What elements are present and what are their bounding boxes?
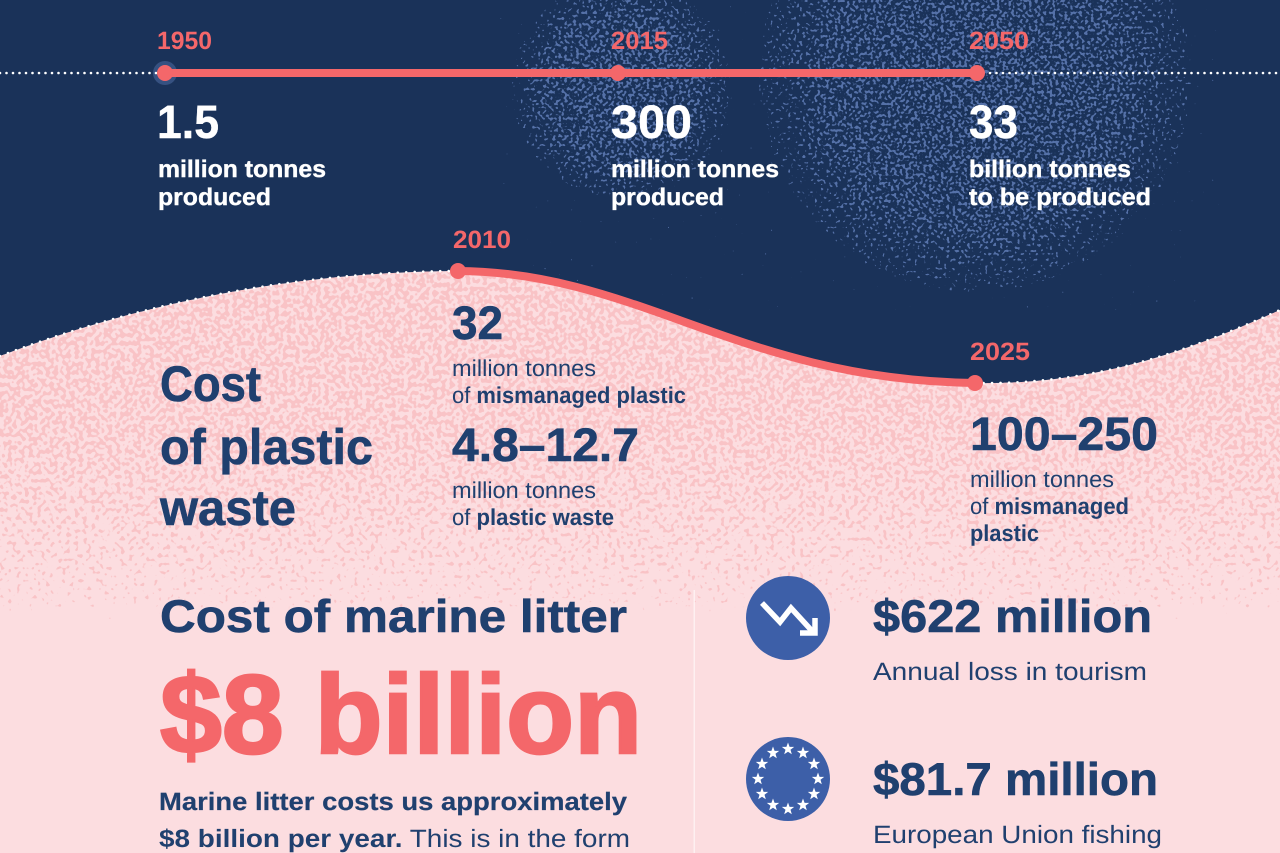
stat: 2025: 2025 (970, 338, 1030, 366)
stat: 1950: 1.5 (157, 95, 219, 148)
divider (694, 590, 695, 853)
stat: 2015: 2015 (611, 27, 668, 55)
stat: 2010: million tonnes (452, 477, 596, 503)
heading: cost of plastic waste (159, 356, 373, 536)
small production circle 1950 (153, 61, 177, 85)
stat: 2025: 100–250 (970, 407, 1158, 460)
stat: 2025: plastic (970, 520, 1039, 546)
stat: 2025: million tonnes (970, 466, 1114, 492)
heading: cost of plastic waste: Cost (160, 356, 261, 412)
panel: cost of marine litter (159, 590, 642, 853)
stat: 2015: million tonnes (611, 156, 779, 183)
icon: falling trend arrow (746, 576, 830, 660)
stat: tourism loss (873, 590, 1152, 686)
stat: tourism loss: Annual loss in tourism (873, 658, 1147, 686)
stat: EU fishing (873, 753, 1162, 849)
panel: cost of marine litter: $8 billion per year. This is in the form (159, 825, 630, 853)
dotted white edge of wave (0, 271, 1280, 383)
stat: 2010: 4.8–12.7 (452, 418, 639, 471)
stat: 2050: 2050 (969, 27, 1029, 55)
stat: 2050: billion tonnes (969, 156, 1131, 183)
panel: cost of marine litter: Marine litter costs us approximately (159, 788, 627, 816)
stat: 2050 (969, 27, 1151, 211)
stat: 1950: 1950 (157, 27, 212, 55)
panel: cost of marine litter: Cost of marine litter (160, 590, 627, 642)
stat: 1950 (157, 27, 326, 211)
pink wave panel (0, 271, 1280, 853)
mismanaged plastic curve (450, 263, 983, 391)
icon: EU stars (746, 737, 830, 821)
stat: 2015 (611, 27, 779, 211)
heading: cost of plastic waste: waste (159, 480, 296, 536)
stat: 2010: of mismanaged plastic (452, 382, 686, 408)
stat: tourism loss: $622 million (873, 590, 1152, 642)
stat: 2010 (452, 226, 686, 530)
stat: 2010: 2010 (453, 226, 511, 254)
stat: EU fishing: $81.7 million (873, 753, 1158, 805)
stat: 2015: produced (611, 184, 724, 211)
stat: 2010: of plastic waste (452, 504, 614, 530)
stippled production circles (512, 0, 1191, 292)
stat: 2010: 32 (452, 296, 503, 349)
stat: EU fishing: European Union fishing (873, 821, 1162, 849)
stat: 2050: 33 (969, 95, 1018, 148)
stat: 2010: million tonnes (452, 355, 596, 381)
stat: 2025 (970, 338, 1158, 546)
stat: 1950: produced (158, 184, 271, 211)
panel: cost of marine litter: $8 billion (160, 652, 642, 777)
stat: 1950: million tonnes (158, 156, 326, 183)
stat: 2025: of mismanaged (970, 493, 1129, 519)
heading: cost of plastic waste: of plastic (160, 419, 373, 475)
stat: 2050: to be produced (969, 184, 1151, 211)
stat: 2015: 300 (611, 95, 692, 148)
pink stipple texture (0, 260, 1280, 620)
production timeline (0, 65, 1280, 81)
